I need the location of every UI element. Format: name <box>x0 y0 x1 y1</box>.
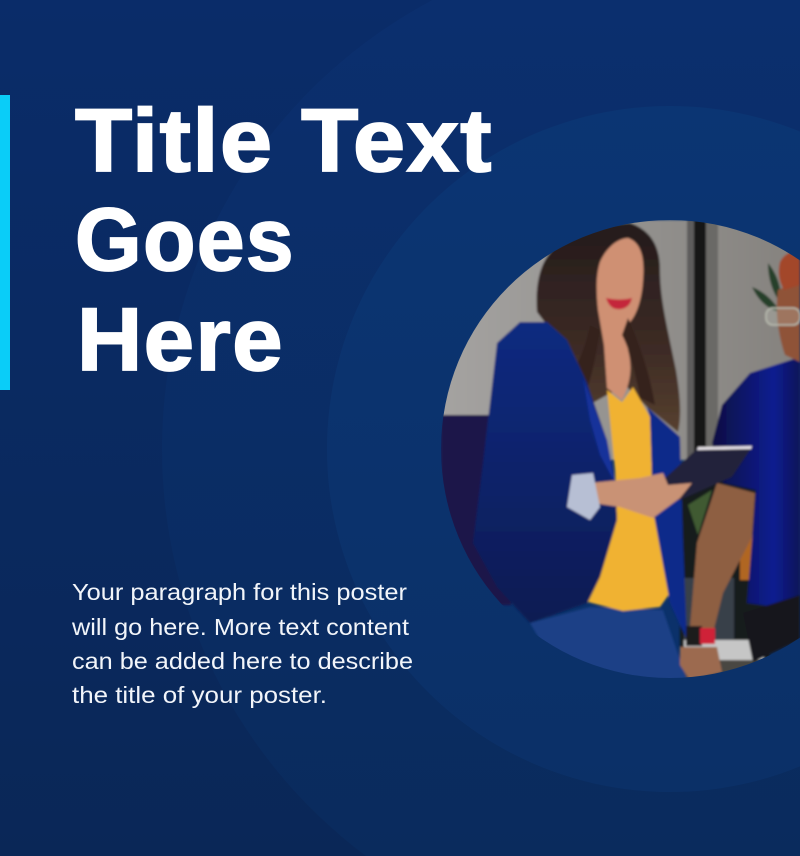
accent bar <box>0 95 10 390</box>
woman's face and neck <box>597 238 643 400</box>
man's trousers <box>743 595 800 662</box>
man's head <box>766 251 800 362</box>
woman's hair <box>537 223 680 432</box>
woman's smile <box>606 298 632 309</box>
paragraph: can be added here to describe <box>72 648 413 674</box>
jacket left side <box>473 322 617 623</box>
plant leaves <box>752 263 781 312</box>
paragraph: the title of your poster. <box>72 682 327 708</box>
hair strands over the shoulders <box>576 318 654 404</box>
background below tablet <box>680 470 770 680</box>
man's hand <box>680 647 722 680</box>
woman's hand <box>590 473 692 518</box>
shirt cuff <box>567 473 600 520</box>
man's arm <box>690 483 755 633</box>
jacket right side <box>647 407 687 640</box>
inner background circle <box>327 106 800 792</box>
jacket lapel <box>583 378 615 483</box>
title <box>75 90 493 389</box>
jeans <box>530 607 687 680</box>
outer background circle <box>162 0 800 856</box>
man's shirt <box>712 357 800 610</box>
title: Goes <box>75 189 295 289</box>
photo: two colleagues with a tablet <box>441 220 800 680</box>
dark window column <box>687 220 718 460</box>
paragraph: will go here. More text content <box>71 614 409 640</box>
title: Title Text <box>75 90 493 190</box>
watch <box>686 626 715 646</box>
title: Here <box>77 289 284 389</box>
purple lower wall <box>441 415 511 605</box>
paragraph <box>71 579 413 708</box>
paragraph: Your paragraph for this poster <box>72 579 407 605</box>
wall <box>441 220 800 460</box>
blouse <box>588 387 670 611</box>
tablet <box>652 446 752 500</box>
